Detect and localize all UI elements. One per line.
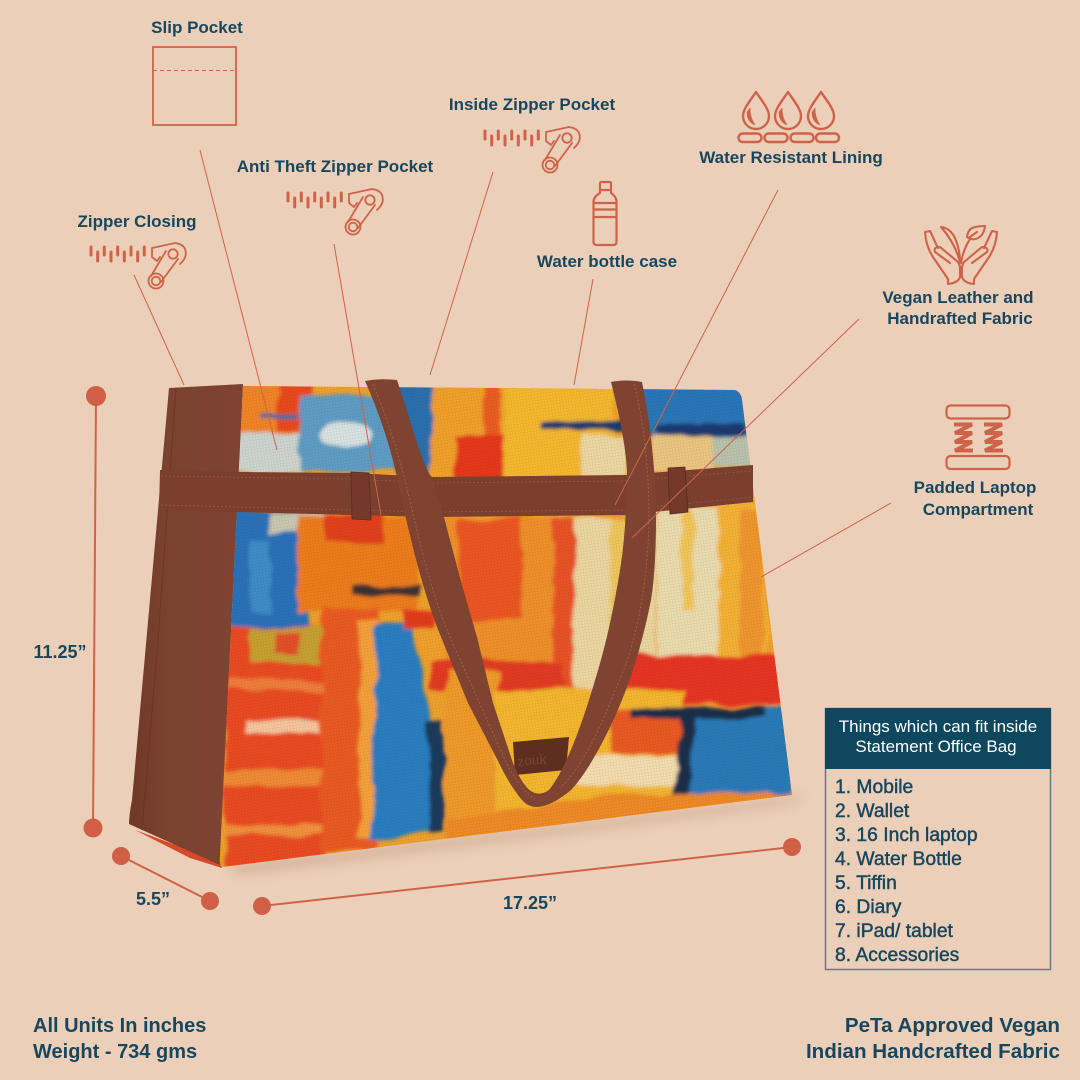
icon: slip pocket	[153, 47, 236, 125]
panel header: Statement Office Bag	[855, 737, 1017, 756]
icon: hands with leaves	[925, 226, 997, 284]
maker label	[513, 737, 569, 775]
item list: 3. 16 Inch laptop	[835, 825, 978, 846]
label: padded laptop: Padded Laptop	[914, 478, 1036, 497]
panel header: Things which can fit inside	[839, 717, 1037, 736]
lower centre	[446, 672, 498, 822]
label: water resistant lining: Water Resistant Lining	[699, 148, 883, 167]
top left	[240, 386, 315, 436]
footer: certification: PeTa Approved Vegan	[845, 1014, 1060, 1037]
belt loops	[351, 467, 688, 520]
bag: product photo illustration	[129, 379, 805, 880]
dimension: height	[33, 386, 106, 838]
bottom strip	[442, 788, 792, 839]
icon: padding springs	[946, 406, 1010, 469]
centre right	[656, 508, 718, 670]
label: padded laptop	[914, 478, 1036, 519]
shoulder strap	[365, 379, 656, 807]
footer: certification	[806, 1014, 1060, 1063]
item list: 6. Diary	[835, 897, 902, 918]
dimension: depth: 5.5”	[136, 889, 170, 909]
label: vegan leather: Vegan Leather and	[882, 288, 1034, 307]
fabric panel with abstract paint	[210, 380, 801, 880]
dimension: depth	[112, 847, 219, 910]
dimension: width	[253, 838, 801, 915]
maker label: zouk	[517, 751, 548, 770]
label: padded laptop: Compartment	[923, 500, 1034, 519]
label: anti theft zipper pocket: Anti Theft Zipper Pocket	[237, 157, 434, 176]
bag underside sliver	[135, 830, 222, 868]
red bars	[611, 655, 801, 705]
item list: 2. Wallet	[835, 801, 910, 822]
label: vegan leather: Handrafted Fabric	[887, 309, 1033, 328]
label: slip pocket: Slip Pocket	[151, 18, 243, 37]
top centre	[432, 380, 488, 480]
icon: zipper anti theft	[288, 189, 383, 234]
footer: units and weight: All Units In inches	[33, 1015, 206, 1037]
label: zipper closing: Zipper Closing	[78, 212, 196, 231]
item list: 1. Mobile	[835, 777, 913, 798]
footer: units and weight: Weight - 734 gms	[33, 1041, 197, 1063]
below belt left	[225, 510, 309, 628]
icon: water drops	[738, 92, 839, 142]
top right	[643, 389, 747, 440]
centre columns	[321, 610, 381, 850]
icon: zipper closing	[91, 243, 186, 288]
icon: water bottle	[593, 182, 617, 245]
lower right	[682, 708, 794, 804]
item list: 5. Tiffin	[835, 873, 897, 894]
item list	[835, 777, 978, 966]
label: water bottle case: Water bottle case	[537, 252, 677, 271]
item list: 4. Water Bottle	[835, 849, 962, 870]
dimension: height: 11.25”	[33, 642, 87, 662]
item list: 7. iPad/ tablet	[835, 921, 954, 942]
footer: units and weight	[33, 1015, 206, 1063]
icon: zipper inside	[485, 127, 580, 172]
bag shadow	[225, 796, 805, 874]
label: vegan leather	[882, 288, 1034, 328]
footer: certification: Indian Handcrafted Fabric	[806, 1040, 1060, 1063]
leader lines	[134, 150, 891, 577]
item list: 8. Accessories	[835, 945, 959, 966]
panel header	[825, 708, 1051, 769]
dimension: width: 17.25”	[503, 893, 557, 913]
label: inside zipper pocket: Inside Zipper Pocket	[449, 95, 615, 114]
panel: things which can fit inside	[825, 708, 1051, 970]
side panel	[129, 384, 243, 866]
belt	[159, 465, 753, 517]
